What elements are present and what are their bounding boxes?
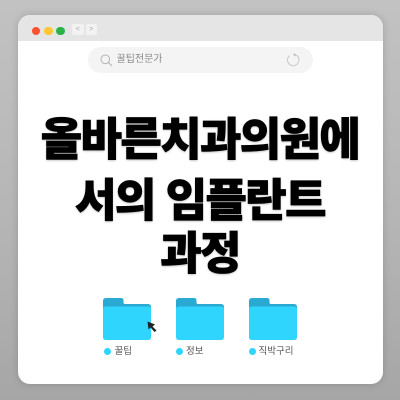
search bar	[88, 47, 312, 72]
icon: folder	[176, 298, 224, 340]
forward button	[86, 24, 97, 35]
window control: minimize	[44, 26, 53, 35]
icon: reload	[287, 53, 300, 66]
back button	[72, 24, 84, 35]
icon: folder	[103, 298, 151, 340]
window control: close	[32, 26, 40, 35]
folder: 직박구리	[249, 298, 297, 357]
title bar	[18, 15, 382, 41]
label: 정보	[186, 346, 203, 357]
folder: 정보	[176, 298, 224, 357]
title	[41, 103, 359, 282]
icon: folder	[249, 298, 297, 340]
back button: <	[76, 26, 80, 32]
title line 1: 올바른치과의원에	[41, 103, 359, 168]
legend dot	[104, 348, 111, 355]
forward button: >	[89, 26, 93, 32]
legend dot	[248, 348, 256, 355]
legend dot	[176, 348, 183, 355]
label: 직박구리	[258, 346, 293, 357]
folder: 꿀팁	[103, 298, 156, 357]
title line 2: 서의 임플란트	[75, 164, 325, 229]
search text: 꿀팁전문가	[116, 54, 162, 65]
icon: cursor	[148, 322, 156, 332]
label: 꿀팁	[114, 346, 132, 357]
window control: maximize	[56, 26, 65, 35]
icon: magnifier	[100, 54, 112, 66]
title line 3: 과정	[160, 217, 240, 282]
